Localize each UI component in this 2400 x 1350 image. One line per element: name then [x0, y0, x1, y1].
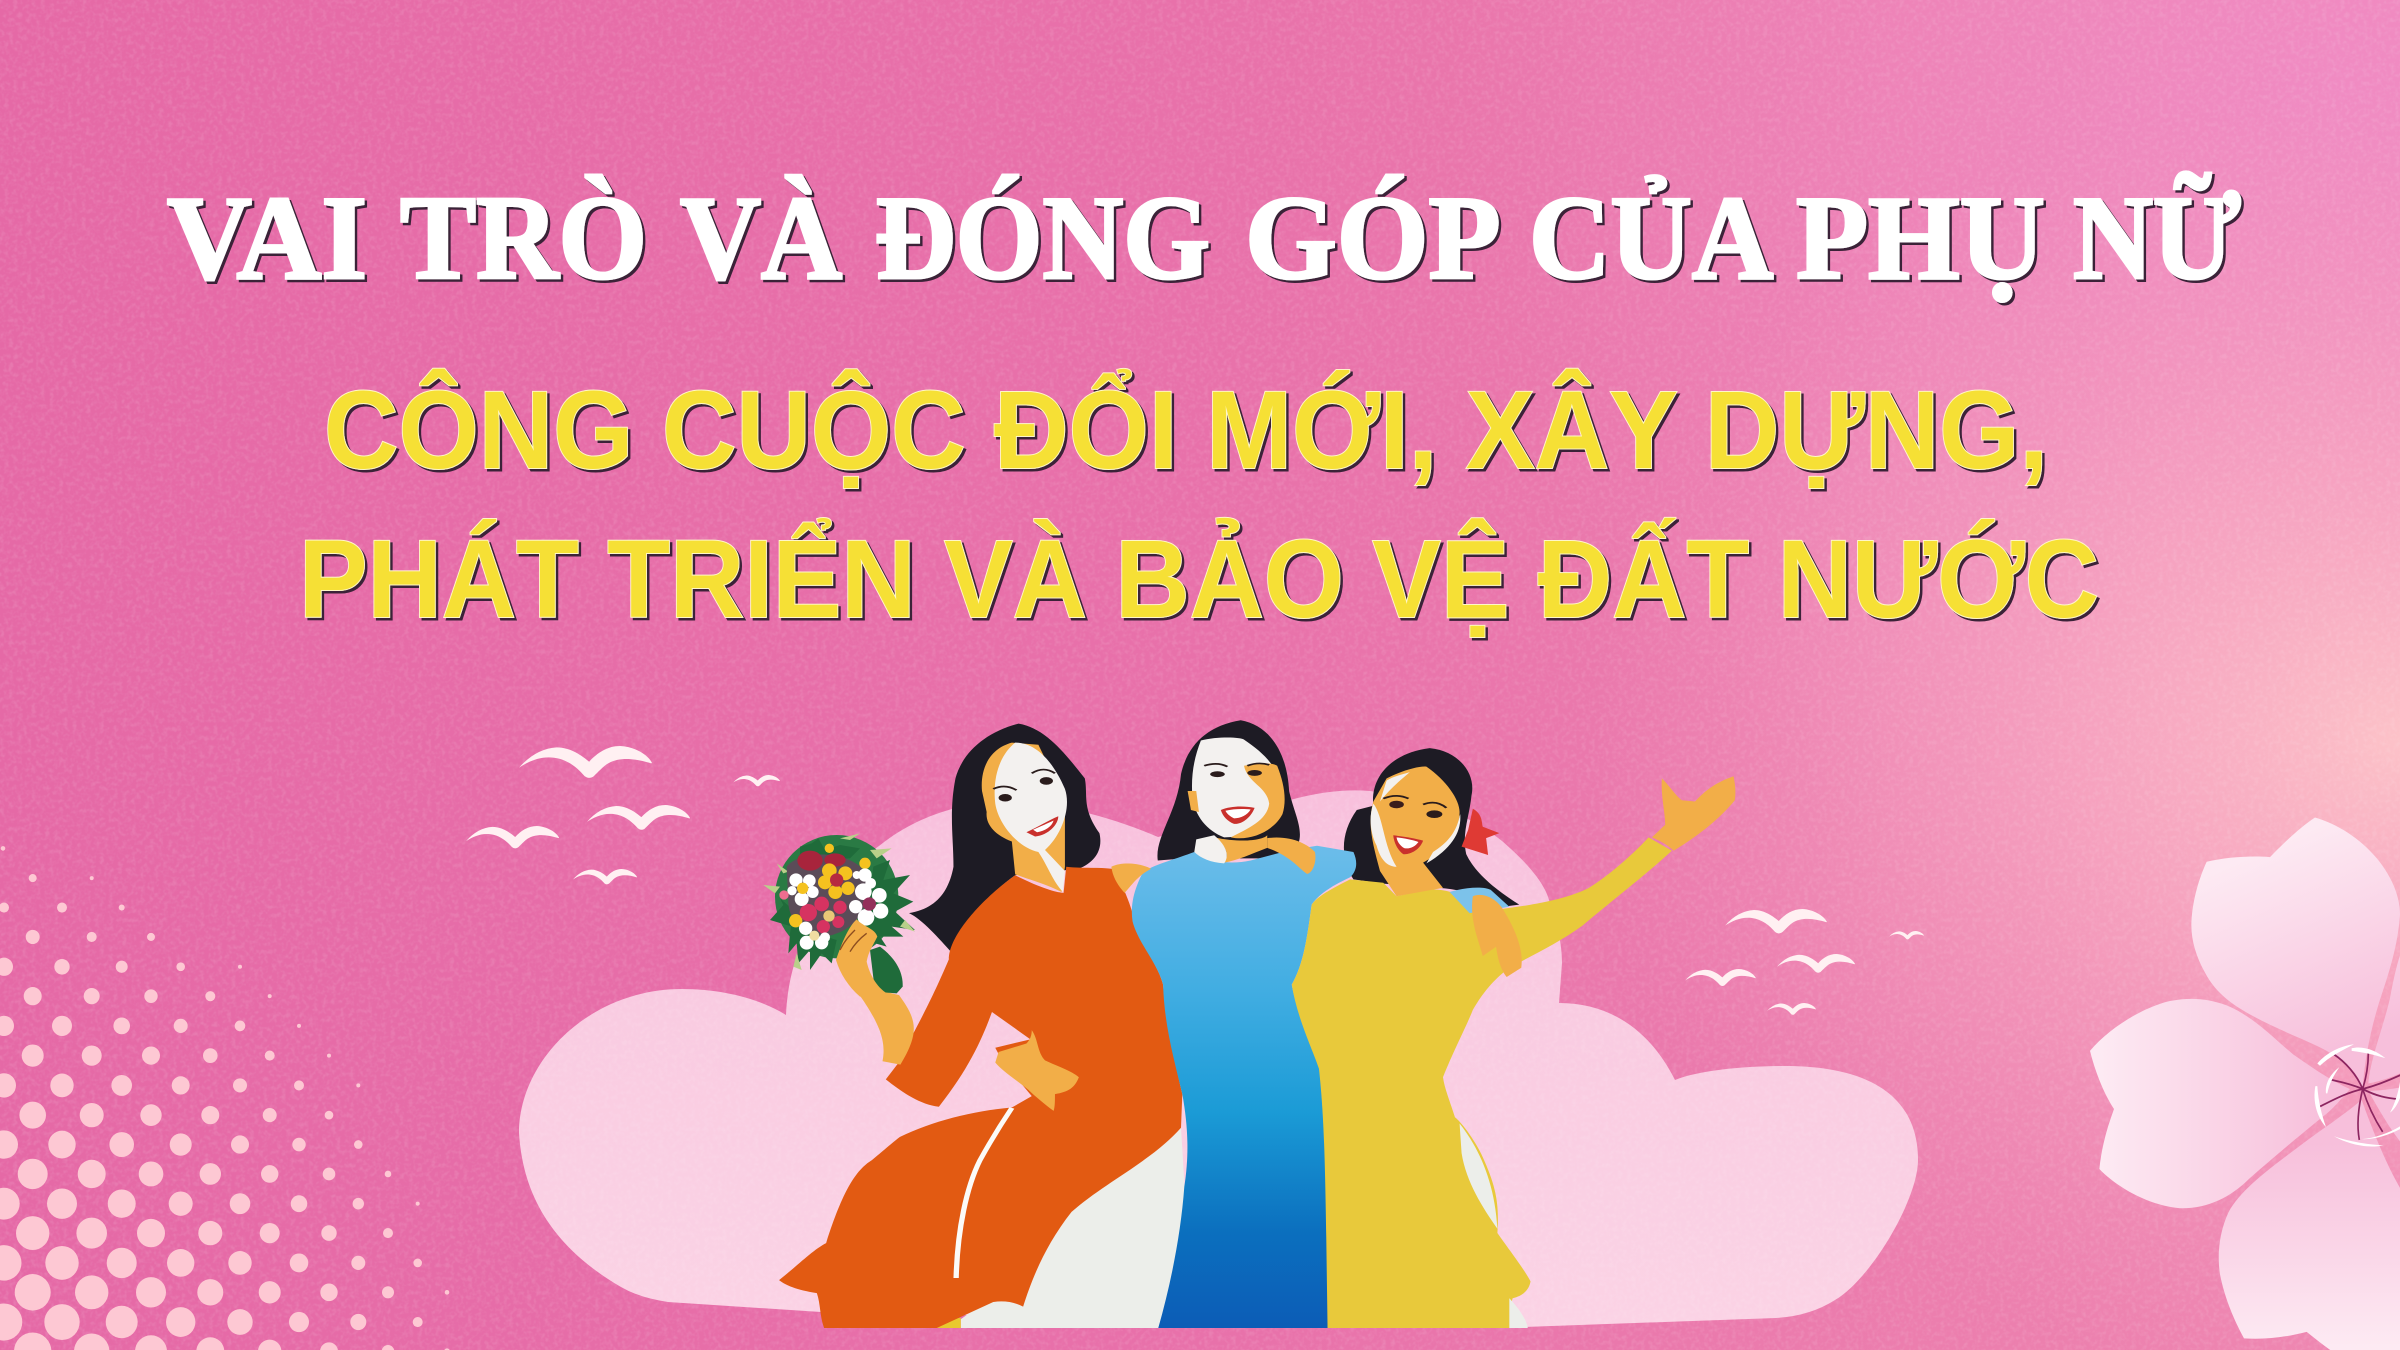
white trousers: [961, 1128, 1188, 1330]
white daisy left: [787, 873, 819, 906]
middle woman features: [1204, 763, 1269, 824]
illustration: three women in ao dai: [779, 720, 1735, 1330]
white daisy lower: [799, 922, 830, 950]
blue ao dai: [1132, 846, 1356, 1330]
hair: middle woman: [1157, 720, 1300, 860]
orange ao dai: [779, 867, 1182, 1330]
left woman features: [993, 770, 1058, 836]
blue sleeve behind right woman: [1450, 888, 1509, 913]
title line white: VÀ: [680, 171, 842, 304]
icon: cherry blossom flower: [2090, 817, 2400, 1350]
yellow bloom cluster: [789, 844, 871, 927]
right woman features: [1383, 796, 1446, 854]
magenta bloom cluster: [800, 897, 847, 933]
bouquet foliage: [763, 833, 915, 970]
hand from left on shoulder: [1111, 864, 1151, 893]
title line white: ĐÓNG: [875, 171, 1210, 304]
white daisy large: [849, 883, 888, 926]
subtitle line 1 yellow: CÔNG CUỘC ĐỔI MỚI, XÂY DỰNG,: [324, 369, 2048, 492]
hand on waist: [995, 1030, 1079, 1111]
orange dress white slit: [956, 1108, 1012, 1278]
title line white: VAI: [167, 171, 367, 304]
arm over yellow shoulder: [1472, 895, 1522, 977]
white daisy upper right: [853, 868, 876, 889]
title line white: CỦA: [1529, 171, 1773, 304]
red ribbon: [1462, 809, 1499, 855]
left woman neck and face: [982, 743, 1065, 892]
flower bouquet: [763, 833, 915, 997]
hand holding bouquet: [836, 919, 895, 997]
birds: right flock: [1685, 909, 1924, 1015]
dark red blooms: [797, 851, 846, 871]
title line white: PHỤ: [1796, 171, 2045, 304]
subtitle line 2 yellow: PHÁT TRIỂN VÀ BẢO VỆ ĐẤT NƯỚC: [299, 518, 2099, 641]
left forearm: [857, 985, 914, 1065]
hair: right woman: [1344, 748, 1519, 907]
raised right hand: [1652, 776, 1735, 851]
halftone dots: [0, 846, 450, 1350]
hand on middle shoulder: [1267, 838, 1315, 874]
title line white: TRÒ: [400, 171, 647, 304]
title line white: NỮ: [2073, 170, 2241, 304]
right woman neck and face: [1371, 766, 1460, 896]
yellow ao dai: [1292, 837, 1672, 1330]
yellow hem: [937, 1318, 961, 1328]
middle woman neck and face: [1192, 738, 1284, 837]
pink cloud: [519, 790, 1918, 1327]
hair: left woman: [909, 724, 1100, 953]
birds: left flock: [466, 746, 780, 884]
title line white: GÓP: [1245, 171, 1497, 304]
white trousers right: [1460, 1124, 1528, 1330]
